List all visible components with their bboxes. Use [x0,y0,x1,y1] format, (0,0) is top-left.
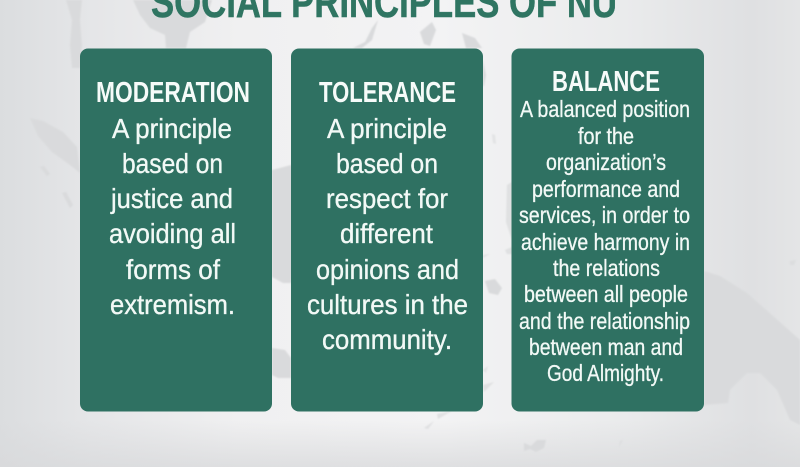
text: moderation description: avoiding all [109,218,236,249]
text: balance description: services, in order to [519,202,690,228]
text: tolerance description: A principle [327,113,447,144]
text: moderation description: forms of [126,254,220,285]
text: balance description: and the relationship [519,308,690,334]
heading: moderation: MODERATION [96,77,250,109]
heading: tolerance: TOLERANCE [319,77,456,109]
text: tolerance description: cultures in the [307,289,468,320]
text: balance description: between man and [529,334,683,360]
text: balance description: achieve harmony in [521,229,690,255]
panel: tolerance [291,48,483,412]
text: balance description: organization’s [546,149,666,175]
text: balance description: for the [578,123,634,149]
text: balance description: the relations [553,255,660,281]
panel: balance [512,48,704,412]
text: tolerance description: different [340,218,433,249]
text: moderation description: extremism. [110,289,235,320]
text: balance description: performance and [532,176,680,202]
text: balance description: God Almighty. [547,360,664,386]
text: balance description [519,96,690,386]
text: tolerance description: opinions and [316,254,459,285]
text: balance description: A balanced position [520,96,690,122]
text: moderation description [109,113,236,320]
heading: balance: BALANCE [552,66,660,98]
panel: moderation [80,48,272,412]
text: moderation description: A principle [112,113,232,144]
text: moderation description: justice and [110,183,233,214]
text: tolerance description: respect for [326,183,448,214]
text: tolerance description: based on [336,148,438,179]
text: tolerance description: community. [322,324,452,355]
text: balance description: between all people [524,281,688,307]
text: tolerance description [307,113,468,355]
text: moderation description: based on [122,148,223,179]
